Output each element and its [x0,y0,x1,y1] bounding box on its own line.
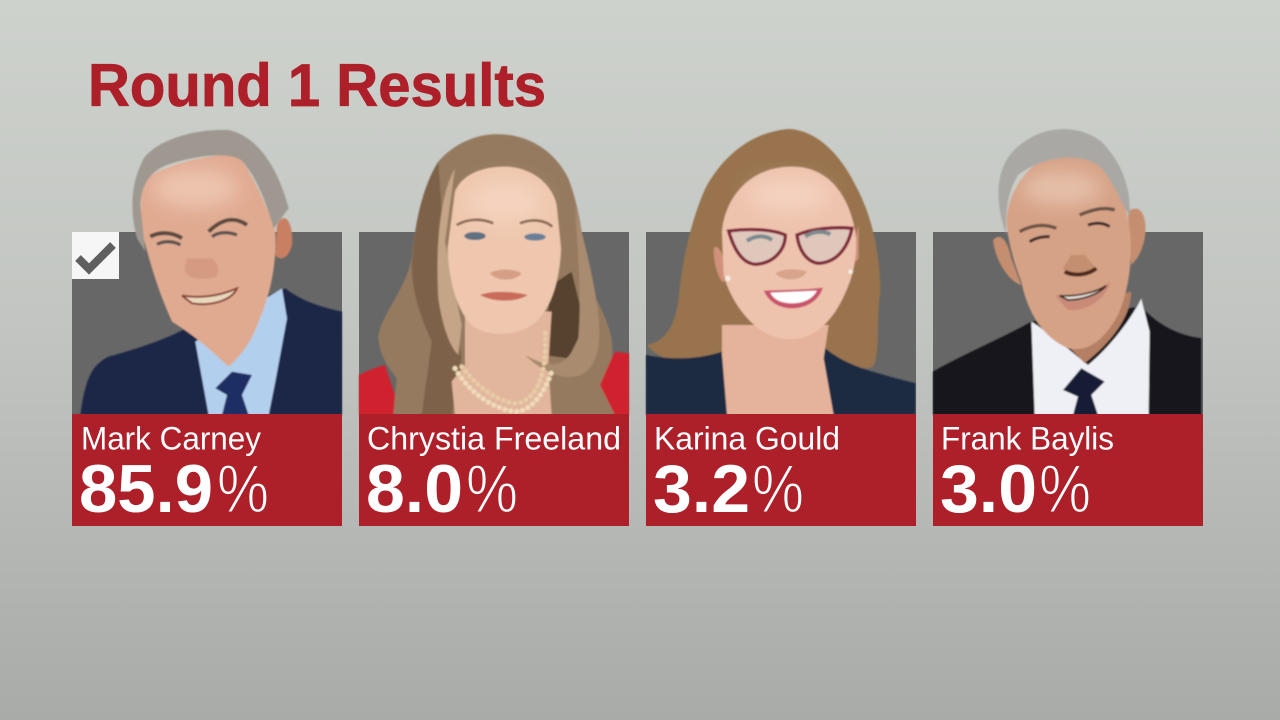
percentage: 3.2 [653,451,750,527]
result bar [646,414,916,526]
percentage: 8.0 [366,451,463,527]
percentage: % [217,451,269,527]
percentage [653,451,804,527]
portrait: Karina Gould [646,129,915,415]
percentage [79,451,269,527]
panel: Frank Baylis [933,129,1203,527]
result bar [72,414,342,526]
portrait backdrop [933,232,1203,414]
name: Chrystia Freeland [367,420,621,456]
percentage: % [466,451,518,527]
panel: Chrystia Freeland [359,134,629,527]
result bar [933,414,1203,526]
percentage [366,451,518,527]
name: Karina Gould [654,420,840,456]
percentage [940,451,1091,527]
portrait backdrop [646,232,916,414]
portrait: Chrystia Freeland [359,134,629,415]
percentage: % [752,451,804,527]
portrait: Mark Carney [80,130,342,415]
percentage: 85.9 [79,451,213,527]
title: Round 1 Results [88,52,546,119]
panel: Karina Gould [646,129,916,527]
portrait backdrop [72,232,342,414]
portrait backdrop [359,232,629,414]
check badge [72,232,119,279]
portrait: Frank Baylis [933,129,1201,415]
name: Frank Baylis [941,420,1114,456]
result bar [359,414,629,526]
percentage: % [1039,451,1091,527]
panel: Mark Carney [72,130,342,527]
name: Mark Carney [81,420,261,456]
percentage: 3.0 [940,451,1037,527]
